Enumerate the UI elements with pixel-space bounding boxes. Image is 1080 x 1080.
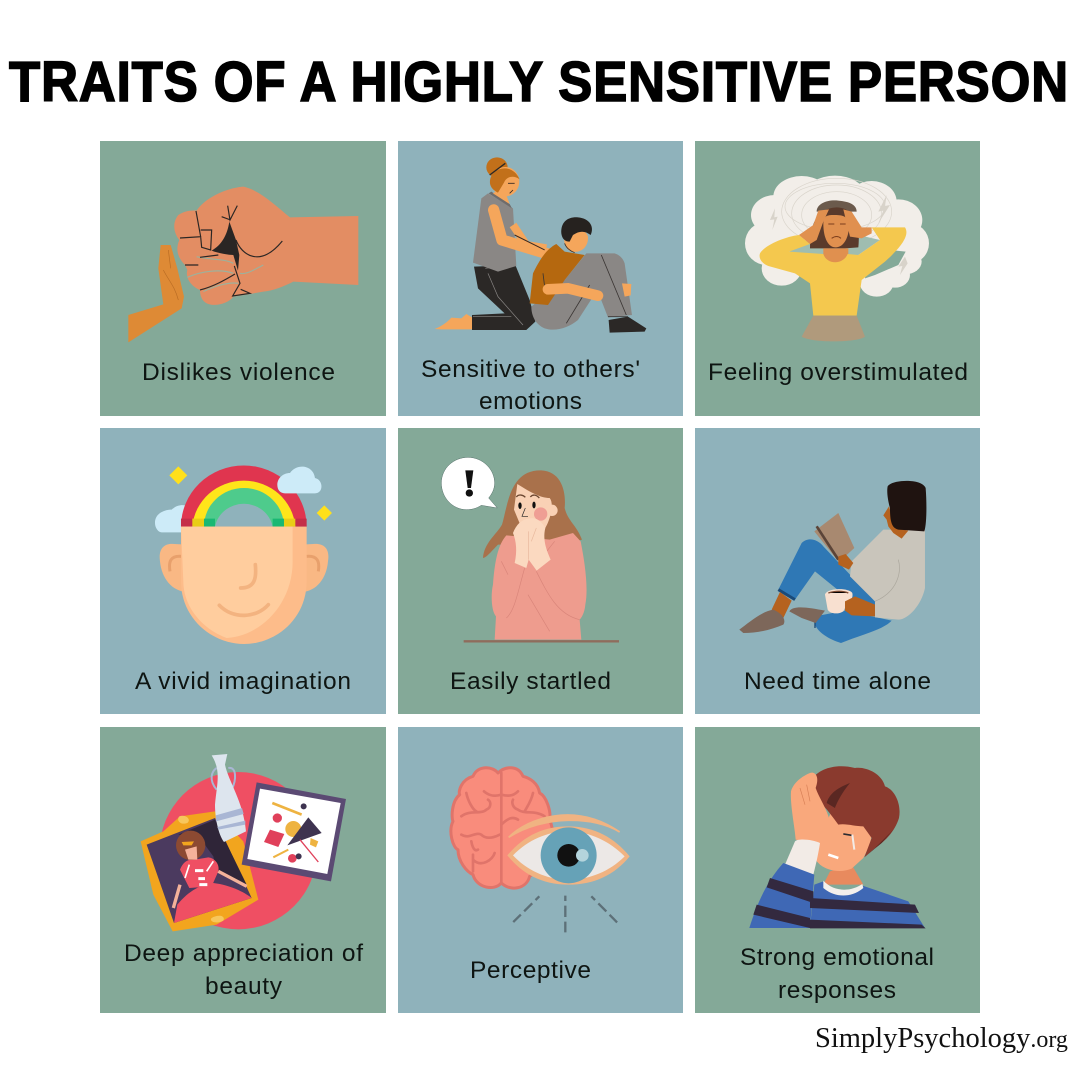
icon: startled woman with speech bubble: [441, 457, 619, 641]
panel: a vivid imagination: [100, 428, 386, 714]
icon: brain and eye: [451, 768, 630, 935]
panel: easily startled: [398, 428, 683, 714]
label: Sensitive to others': [421, 356, 640, 383]
icon: overstimulated woman in cloud: [745, 176, 929, 341]
label: Need time alone: [744, 668, 931, 695]
panel: perceptive: [398, 727, 683, 1013]
label: Deep appreciation of: [124, 940, 363, 967]
icon: person reading with coffee: [739, 481, 926, 643]
panel: deep appreciation of beauty: [100, 727, 386, 1013]
icon: head with rainbow: [155, 466, 332, 644]
source credit: SimplyPsychology.org: [815, 1023, 1068, 1054]
icon: crying young man: [749, 766, 926, 928]
label line 2: emotions: [479, 388, 582, 415]
panel: sensitive to others' emotions: [398, 141, 683, 416]
label: A vivid imagination: [135, 668, 351, 695]
label: Feeling overstimulated: [708, 359, 968, 386]
icon: fist and stop hand: [128, 187, 358, 342]
label: Perceptive: [470, 957, 591, 984]
label: Easily startled: [450, 668, 611, 695]
label line 2: responses: [778, 977, 896, 1004]
panel: need time alone: [695, 428, 980, 714]
icon: woman comforting man: [435, 157, 646, 333]
label: Strong emotional: [740, 944, 934, 971]
label line 2: beauty: [205, 973, 283, 1000]
panel: dislikes violence: [100, 141, 386, 416]
panel: strong emotional responses: [695, 727, 980, 1013]
label: Dislikes violence: [142, 359, 335, 386]
panel: feeling overstimulated: [695, 141, 980, 416]
icon: art frames and vase: [141, 754, 346, 931]
